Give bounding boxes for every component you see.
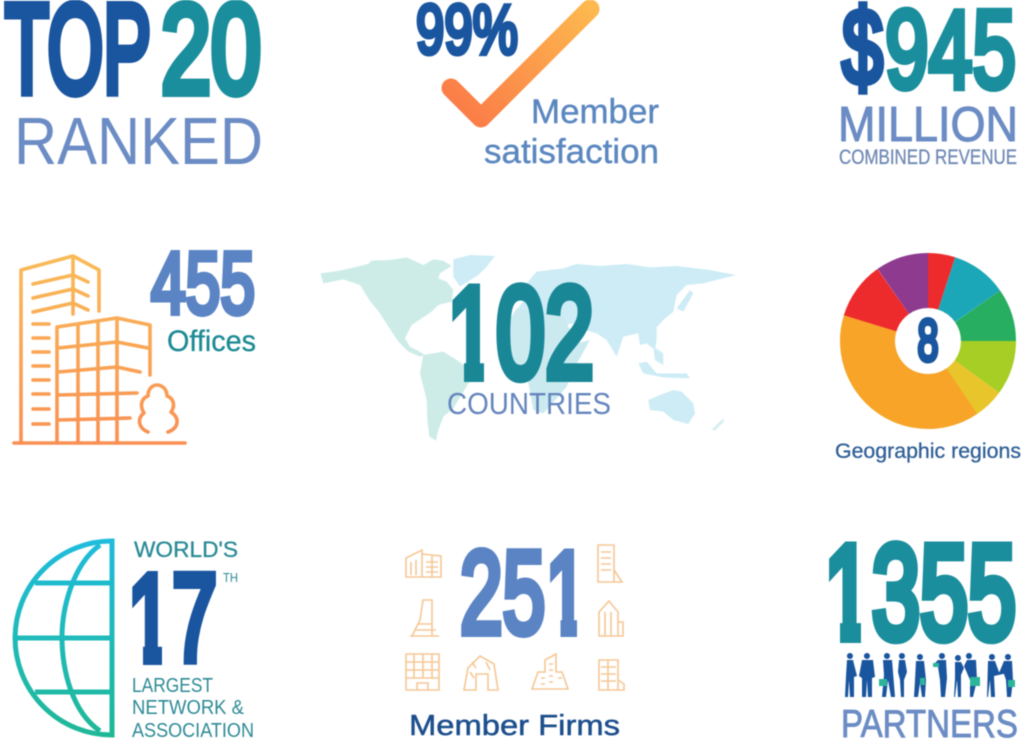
heading: 102: 102: [447, 260, 594, 406]
label: satisfaction: satisfaction: [484, 133, 659, 171]
map: world: [321, 255, 736, 441]
label: world's: WORLD'S: [134, 537, 238, 562]
label: association: ASSOCIATION: [132, 720, 254, 742]
stat: offices: [14, 235, 256, 443]
icon: half globe: [15, 541, 112, 735]
icons: small buildings: [406, 545, 624, 690]
stat: partners: [828, 539, 1018, 739]
label: countries: COUNTRIES: [447, 386, 611, 421]
label: network: NETWORK &: [132, 697, 245, 719]
icon: check mark: [451, 9, 590, 118]
icons: green briefcases: [879, 663, 1015, 687]
heading: 251: 251: [460, 527, 588, 658]
illustration: business people: [845, 653, 1013, 697]
stat: member firms: [406, 527, 624, 742]
label: th: TH: [223, 570, 238, 585]
chart: donut: [843, 256, 1013, 426]
heading: 455: 455: [151, 235, 255, 332]
stat: combined revenue: [838, 0, 1018, 169]
stat: countries: [321, 255, 736, 441]
label: geographic regions: Geographic regions: [835, 440, 1021, 463]
stat: geographic regions: [835, 256, 1021, 463]
stat: member satisfaction: [416, 0, 659, 171]
stat: top 20 ranked: [5, 0, 263, 179]
label: member firms: Member Firms: [409, 710, 620, 742]
label: ranked: RANKED: [14, 104, 263, 179]
icon: office buildings and tree: [14, 256, 185, 443]
label: largest: LARGEST: [132, 675, 213, 697]
label: offices: Offices: [167, 325, 256, 358]
label: member: Member: [531, 93, 659, 131]
heading: 17: 17: [128, 550, 217, 688]
heading: 8: 8: [918, 308, 938, 374]
stat: world's 17th largest: [15, 537, 254, 742]
